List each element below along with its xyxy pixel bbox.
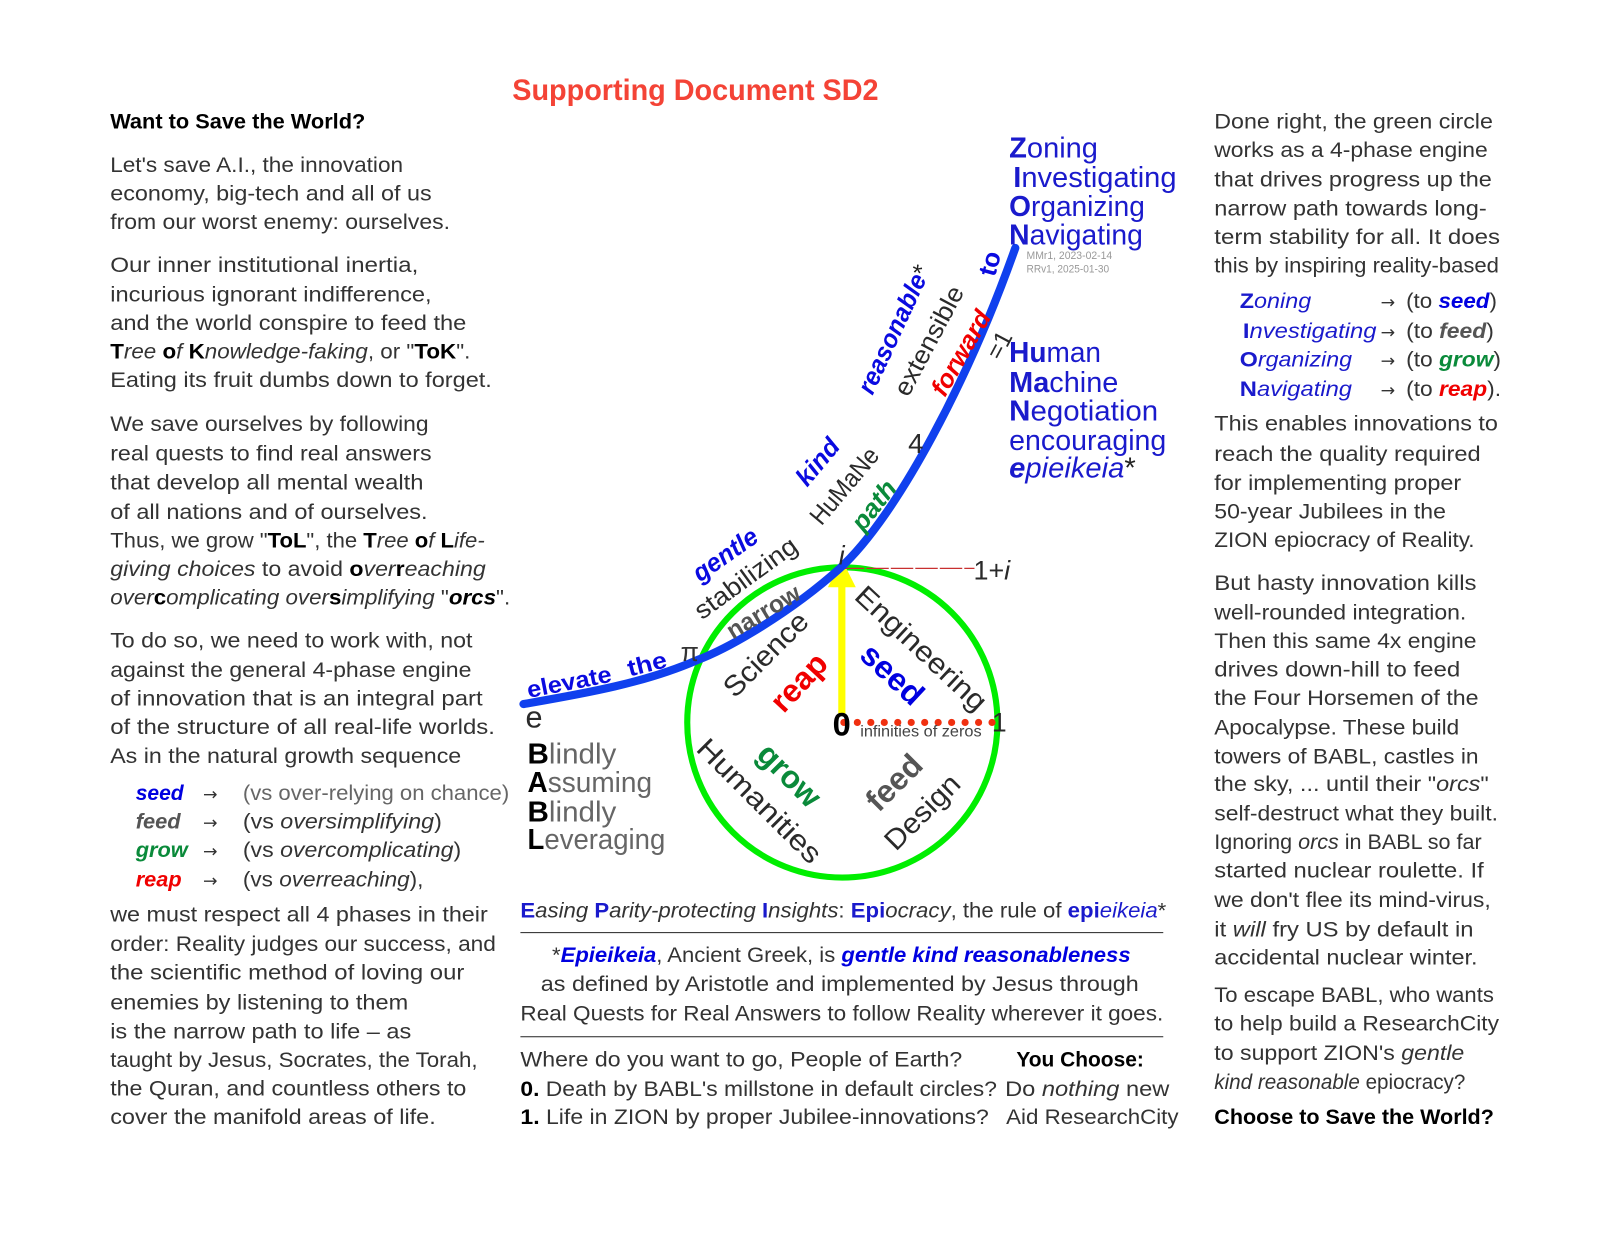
labels on the curve: HuMaNe	[805, 442, 885, 530]
labels in the circle: Engineering	[848, 580, 993, 718]
list: ZION mapping: →	[1381, 293, 1395, 313]
list: ZION mapping: (to feed)	[1406, 319, 1494, 343]
paragraph: 4-phase engine: As in the natural growth sequence	[110, 744, 461, 768]
choice table: Where do you want to go, People of Earth?	[520, 1047, 962, 1071]
list: growth sequence: seed	[136, 781, 185, 805]
right text column	[1213, 110, 1501, 1129]
paragraph: hasty innovation: Apocalypse. These build	[1214, 716, 1459, 740]
list: growth sequence: (vs overreaching ),	[243, 868, 423, 892]
paragraph: 4-phase engine: term stability for all. It does	[1214, 225, 1500, 249]
labels in the circle: reap	[762, 645, 835, 719]
list: ZION mapping: (to seed)	[1406, 289, 1497, 313]
list: growth sequence: feed	[136, 810, 182, 834]
choice table: 1. Life in ZION by proper Jubilee-innovations?	[520, 1105, 989, 1129]
paragraph: hasty innovation: well-rounded integration.	[1213, 600, 1466, 624]
red dotted line	[844, 719, 993, 726]
paragraph: escape BABL: to support ZION's gentle	[1214, 1041, 1464, 1065]
paragraph: Tree of Life-giving choices: real quests to find real answers	[110, 442, 432, 466]
paragraph: Tree of Knowledge-faking: and the world conspire to feed the	[110, 311, 466, 335]
version notes	[1027, 250, 1112, 275]
list: growth sequence: →	[203, 814, 218, 834]
labels in the circle: infinities of zeros	[860, 724, 982, 741]
ZION acronym: Investigating	[1013, 162, 1177, 194]
paragraph: respect all 4 phases: the scientific method of loving our	[110, 961, 464, 985]
paragraph: escape BABL: To escape BABL, who wants	[1214, 983, 1494, 1007]
labels on the curve: 4	[908, 428, 923, 459]
HuMaNe acronym	[1009, 337, 1166, 485]
labels on the curve: =1	[981, 327, 1018, 364]
list: growth sequence: (vs oversimplifying )	[243, 810, 442, 834]
paragraph: Tree of Knowledge-faking: Our inner institutional inertia,	[110, 253, 418, 277]
paragraph: hasty innovation: self-destruct what they built.	[1214, 801, 1498, 825]
BABL acronym: Blindly	[528, 796, 617, 828]
paragraph: 4-phase engine: narrow path towards long-	[1214, 196, 1487, 220]
paragraph: 4-phase engine: of innovation that is an integral part	[110, 687, 483, 711]
choice table: 0. Death by BABL's millstone in default circles?	[520, 1077, 997, 1101]
list: growth sequence: →	[203, 872, 218, 892]
labels in the circle	[690, 580, 1007, 870]
labels on the curve: 1+i	[973, 556, 1011, 586]
EPI definition line: Easing Parity-protecting Insights: Epiocracy, the rule of epieikeia*	[520, 898, 1166, 922]
paragraph: hasty innovation: But hasty innovation kills	[1214, 571, 1477, 595]
list: growth sequence: reap	[136, 868, 182, 892]
left text column	[109, 110, 510, 1129]
list: ZION mapping: Organizing	[1240, 347, 1352, 371]
ZION acronym: Navigating	[1009, 219, 1143, 251]
paragraph: Jubilees: for implementing proper	[1214, 471, 1461, 495]
paragraph: hasty innovation: Ignoring orcs in BABL so far	[1214, 830, 1482, 854]
list: growth sequence: →	[203, 785, 218, 805]
paragraph: respect all 4 phases: the Quran, and countless others to	[110, 1076, 466, 1100]
labels on the curve: kind	[790, 432, 847, 492]
paragraph: Jubilees: 50-year Jubilees in the	[1214, 499, 1446, 523]
paragraph: 4-phase engine	[110, 628, 495, 768]
paragraph: hasty innovation: Then this same 4x engine	[1214, 629, 1477, 653]
paragraph: Jubilees	[1214, 412, 1498, 552]
paragraph: Tree of Life-giving choices: giving choices to avoid overreaching	[110, 557, 486, 581]
yellow arrow	[834, 567, 850, 714]
choice table: Aid ResearchCity	[1006, 1105, 1179, 1129]
paragraph: save A.I.	[110, 153, 450, 234]
ZION acronym: Organizing	[1009, 191, 1145, 223]
labels in the circle: 0	[833, 706, 851, 743]
blue curve	[523, 248, 1015, 704]
BABL acronym: Assuming	[528, 767, 652, 799]
labels in the circle: Humanities	[690, 732, 828, 870]
paragraph: 4-phase engine	[1213, 110, 1500, 277]
paragraph: Jubilees: This enables innovations to	[1214, 412, 1498, 436]
paragraph: 4-phase engine: that drives progress up the	[1214, 168, 1492, 192]
paragraph: respect all 4 phases: is the narrow path to life – as	[110, 1019, 411, 1043]
labels on the curve: narrow	[722, 579, 807, 645]
epieikeia footnote: Real Quests for Real Answers to follow Reality wherever it goes.	[520, 1001, 1163, 1025]
labels in the circle: Science	[717, 606, 815, 704]
labels in the circle: 1	[992, 708, 1007, 738]
list: growth sequence: (vs overcomplicating )	[243, 838, 461, 862]
HuMaNe acronym: Machine	[1009, 367, 1118, 399]
list: ZION mapping: →	[1381, 381, 1395, 401]
HuMaNe acronym: Negotiation	[1009, 395, 1158, 427]
paragraph: 4-phase engine: this by inspiring reality-based	[1214, 253, 1499, 277]
paragraph: Tree of Life-giving choices: Thus, we grow "ToL", the Tree of Life-	[110, 528, 485, 552]
paragraph: hasty innovation: towers of BABL, castles in	[1214, 744, 1479, 768]
diagram: circle and path	[523, 248, 1018, 878]
list: ZION mapping: (to reap).	[1406, 377, 1501, 401]
labels on the curve: π	[681, 637, 699, 667]
paragraph: Tree of Life-giving choices: We save ourselves by following	[110, 412, 429, 436]
paragraph: 4-phase engine: against the general 4-phase engine	[110, 658, 471, 682]
labels on the curve: elevate	[525, 661, 614, 703]
paragraph: Tree of Life-giving choices	[110, 412, 510, 610]
paragraph: respect all 4 phases	[109, 902, 496, 1129]
paragraph: Jubilees: ZION epiocracy of Reality.	[1214, 528, 1474, 552]
list: ZION mapping: Investigating	[1243, 319, 1377, 343]
labels on the curve: i	[839, 540, 846, 570]
paragraph: 4-phase engine: Done right, the green circle	[1214, 110, 1493, 134]
choice table: Do nothing new	[1005, 1077, 1170, 1101]
paragraph: hasty innovation: drives down-hill to feed	[1214, 658, 1460, 682]
paragraph: Tree of Knowledge-faking: incurious ignorant indifference,	[110, 283, 432, 307]
epieikeia footnote: as defined by Aristotle and implemented by Jesus through	[541, 972, 1139, 996]
paragraph: respect all 4 phases: enemies by listening to them	[110, 991, 408, 1015]
labels on the curve: reasonable*	[853, 261, 937, 398]
BABL acronym: Blindly	[528, 738, 617, 770]
list: growth sequence: →	[203, 842, 218, 862]
paragraph: hasty innovation: started nuclear roulette. If	[1214, 859, 1484, 883]
labels on the curve: gentle	[687, 522, 764, 588]
labels on the curve: stabilizing	[689, 532, 803, 625]
paragraph: escape BABL: kind reasonable epiocracy?	[1214, 1070, 1465, 1094]
green circle	[687, 567, 997, 878]
labels in the circle: grow	[750, 736, 829, 815]
paragraph: respect all 4 phases: taught by Jesus, Socrates, the Torah,	[110, 1048, 478, 1072]
BABL acronym	[528, 738, 665, 856]
paragraph: escape BABL	[1214, 983, 1499, 1094]
labels in the circle: seed	[853, 636, 932, 712]
paragraph: save A.I.: Let's save A.I., the innovation	[110, 153, 403, 177]
labels on the curve: extensible	[889, 281, 970, 401]
epieikeia footnote	[520, 943, 1163, 1025]
paragraph: hasty innovation: accidental nuclear winter.	[1214, 945, 1478, 969]
paragraph: Tree of Knowledge-faking: Eating its fruit dumbs down to forget.	[110, 368, 492, 392]
paragraph: hasty innovation: the Four Horsemen of the	[1214, 686, 1479, 710]
list: ZION mapping: Zoning	[1240, 289, 1311, 313]
labels on the curve: e	[526, 701, 543, 735]
paragraph: Tree of Life-giving choices: of all nations and of ourselves.	[110, 500, 428, 524]
labels on the curve: to	[974, 248, 1007, 279]
paragraph: Tree of Knowledge-faking: Tree of Knowledge-faking , or "ToK".	[110, 340, 470, 364]
paragraph: save A.I.: economy, big-tech and all of us	[110, 182, 432, 206]
list: ZION mapping	[1240, 289, 1501, 401]
paragraph: respect all 4 phases: cover the manifold areas of life.	[110, 1105, 436, 1129]
right closing heading: Choose to Save the World?	[1214, 1105, 1494, 1129]
version notes: MMr1, 2023-02-14	[1027, 250, 1112, 262]
labels in the circle: feed	[858, 747, 930, 818]
paragraph: hasty innovation: the sky, ... until their " orcs"	[1214, 772, 1489, 796]
paragraph: 4-phase engine: works as a 4-phase engine	[1213, 138, 1488, 162]
paragraph: hasty innovation	[1213, 571, 1498, 969]
title: Supporting Document SD2	[512, 74, 879, 107]
paragraph: hasty innovation: it will fry US by default in	[1214, 918, 1473, 942]
BABL acronym: Leveraging	[528, 824, 665, 856]
paragraph: respect all 4 phases: we must respect all 4 phases in their	[109, 902, 488, 926]
HuMaNe acronym: encouraging	[1009, 425, 1166, 457]
list: growth sequence	[135, 781, 509, 892]
paragraph: escape BABL: to help build a ResearchCity	[1214, 1012, 1499, 1036]
list: growth sequence: (vs over-relying on chance)	[243, 781, 509, 805]
paragraph: Tree of Life-giving choices: overcomplicating over simplifying "orcs".	[110, 586, 510, 610]
HuMaNe acronym: Human	[1009, 337, 1101, 369]
paragraph: 4-phase engine: of the structure of all real-life worlds.	[110, 715, 495, 739]
list: ZION mapping: →	[1381, 351, 1395, 371]
paragraph: Jubilees: reach the quality required	[1214, 442, 1481, 466]
labels on the curve: path	[845, 475, 903, 537]
left heading: Want to Save the World?	[110, 110, 365, 134]
labels on the curve: forward	[926, 304, 998, 401]
version notes: RRv1, 2025-01-30	[1027, 263, 1109, 275]
red dashed line to 1+i	[842, 567, 974, 569]
labels on the curve	[525, 248, 1018, 735]
list: growth sequence: grow	[135, 838, 189, 862]
list: ZION mapping: →	[1381, 323, 1395, 343]
choice table: You Choose:	[1016, 1047, 1144, 1071]
ZION acronym	[1009, 133, 1177, 251]
labels on the curve: the	[625, 647, 669, 681]
paragraph: hasty innovation: we don't flee its mind-virus,	[1213, 888, 1491, 912]
list: ZION mapping: (to grow)	[1406, 347, 1501, 371]
paragraph: Tree of Life-giving choices: that develop all mental wealth	[110, 470, 423, 494]
paragraph: save A.I.: from our worst enemy: ourselves.	[110, 210, 450, 234]
paragraph: Tree of Knowledge-faking	[110, 253, 492, 392]
epieikeia footnote: *Epieikeia, Ancient Greek, is gentle kind reasonableness	[552, 943, 1131, 967]
list: ZION mapping: Navigating	[1240, 377, 1352, 401]
choice table	[520, 1047, 1179, 1129]
paragraph: 4-phase engine: To do so, we need to work with, not	[110, 628, 473, 652]
HuMaNe acronym: epieikeia*	[1009, 453, 1136, 485]
labels in the circle: Design	[878, 768, 967, 857]
paragraph: respect all 4 phases: order: Reality judges our success, and	[110, 932, 496, 956]
ZION acronym: Zoning	[1009, 133, 1098, 165]
